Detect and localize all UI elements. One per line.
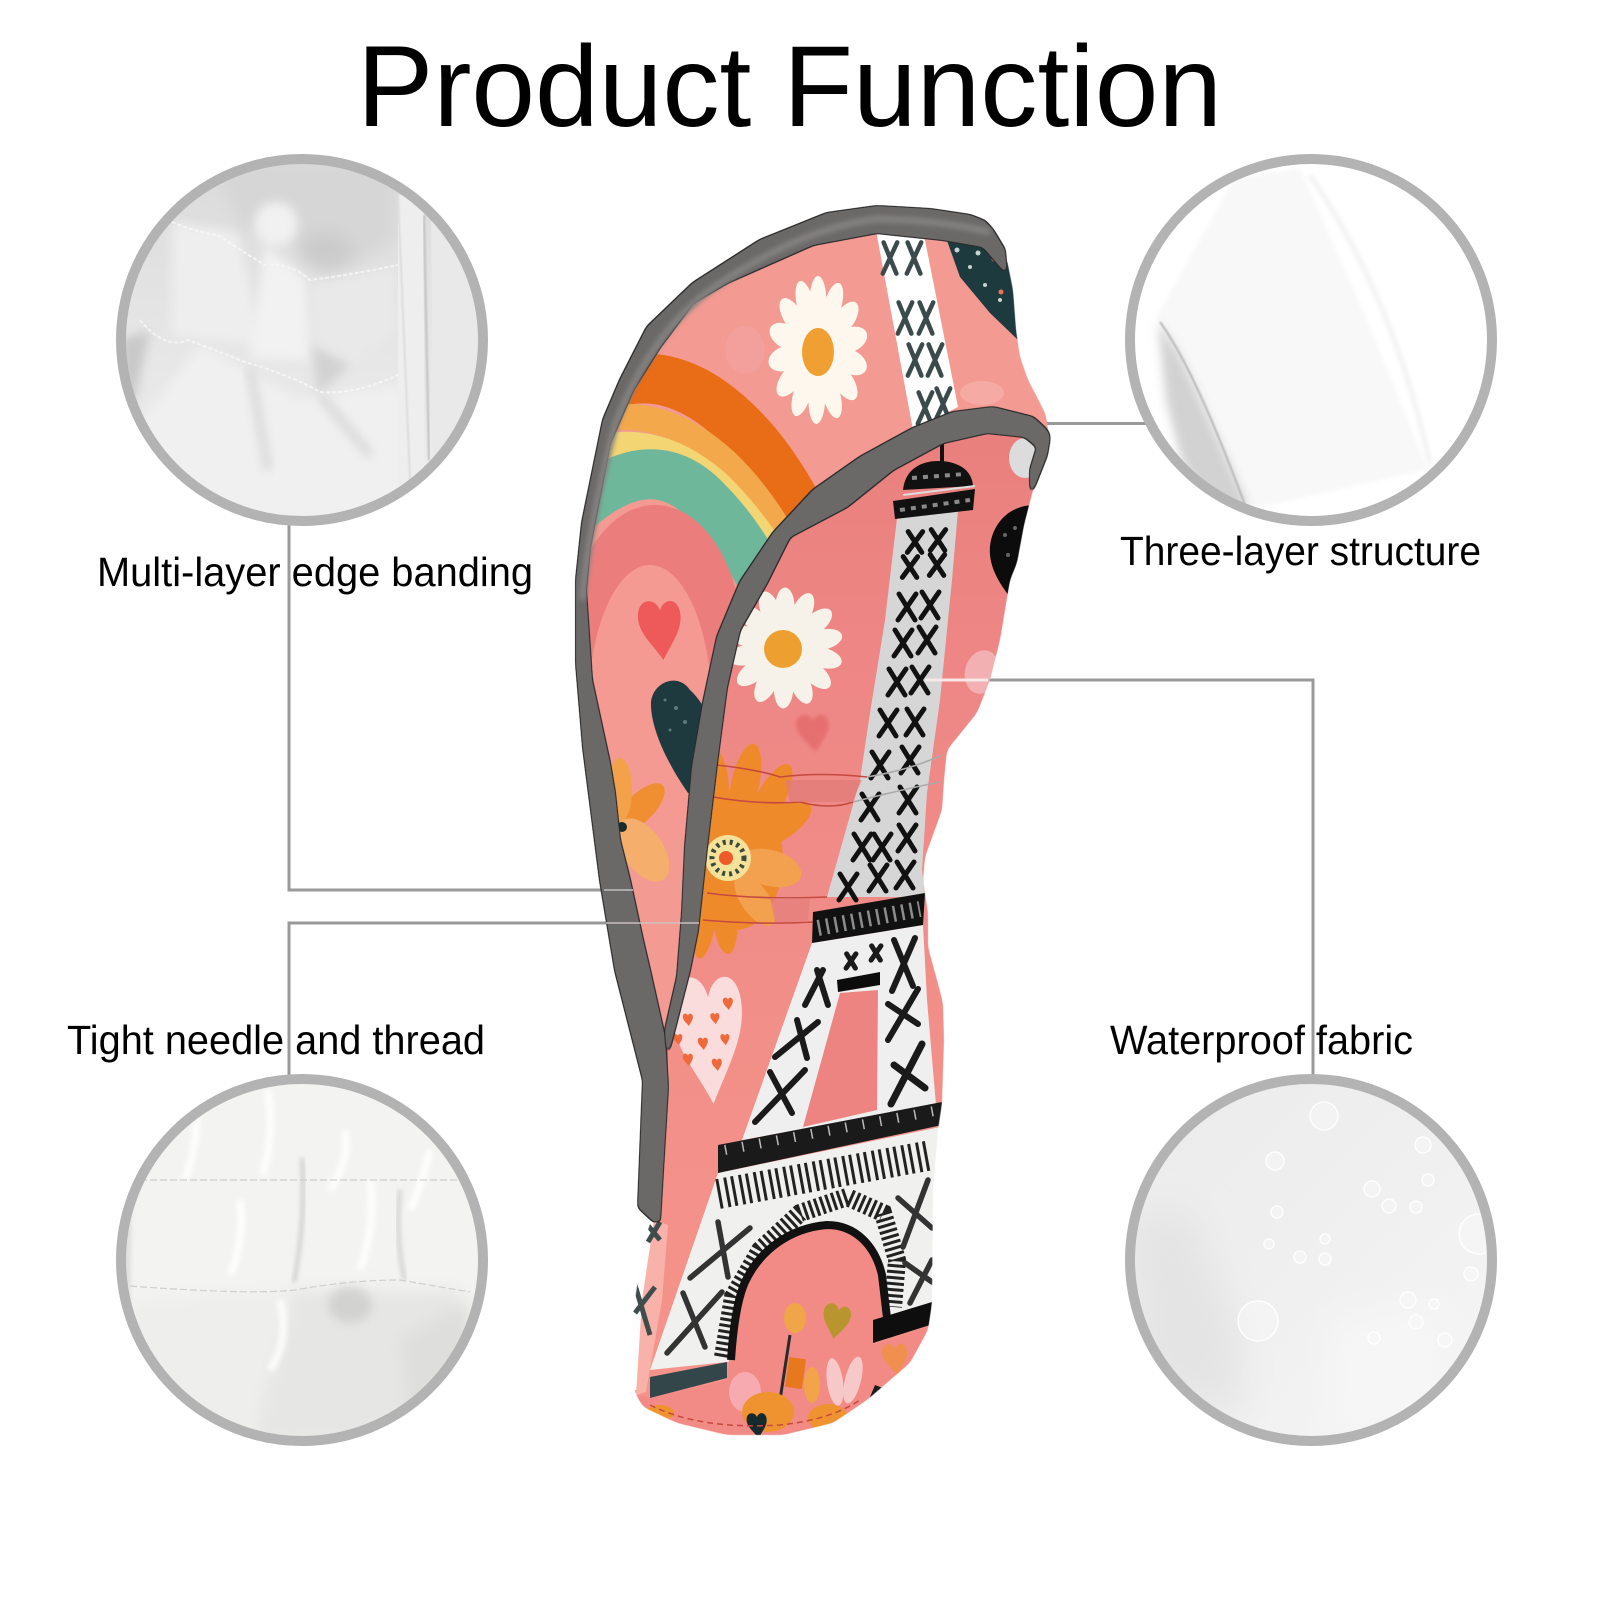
arch fringe	[723, 1197, 897, 1357]
line: multi-layer edge banding	[289, 525, 604, 890]
label: waterproof fabric: Waterproof fabric	[1110, 1017, 1413, 1063]
shaded band between stitches	[785, 780, 862, 802]
dark heart top right	[945, 235, 1018, 340]
tower lower legs	[742, 925, 936, 1140]
line: three-layer structure	[1045, 422, 1148, 425]
faint line crossing product, stitching	[606, 922, 699, 924]
scrap at lower band	[666, 1048, 668, 1069]
black heart right	[990, 505, 1030, 594]
daisy on front	[726, 588, 844, 709]
pink arch	[587, 505, 736, 668]
red heart	[638, 601, 681, 660]
bottom hem stitching	[650, 1400, 860, 1426]
small dim heart	[796, 715, 829, 752]
stitching lines	[703, 755, 942, 923]
bottom flowers	[646, 1302, 907, 1438]
pale patch right	[964, 650, 996, 694]
tower body	[827, 510, 958, 900]
panel: detail circle, three-layer structure	[1125, 154, 1497, 526]
line: tight needle and thread	[289, 923, 606, 1075]
tower feet	[650, 1302, 932, 1398]
daisy on back	[767, 276, 869, 424]
line: waterproof fabric	[985, 680, 1313, 1075]
back panel artwork	[567, 225, 1018, 1070]
loop fringe	[718, 1155, 932, 1194]
connector lines	[289, 424, 1313, 1075]
arch interior	[639, 1221, 903, 1434]
tower strip on back	[875, 225, 958, 430]
panel: detail circle, waterproof fabric	[1125, 1074, 1499, 1446]
tower dome and antenna	[893, 440, 975, 519]
dark heart	[651, 681, 706, 793]
faint line crossing product, banding	[604, 889, 633, 891]
left scrap crosses	[635, 1222, 660, 1335]
band: outer edge binding	[576, 206, 1007, 1222]
band: front flap binding	[665, 407, 1050, 1060]
orange flower on back	[612, 758, 670, 882]
panel: detail circle, edge banding	[116, 154, 490, 526]
tower waist band	[812, 893, 925, 943]
title: Product Function	[357, 23, 1222, 151]
pink heart with small hearts	[672, 977, 742, 1104]
pale circle top right	[1009, 438, 1035, 478]
white line crossing product, waterproof	[925, 678, 988, 682]
crosses beside arch	[667, 1180, 932, 1353]
label: multi-layer edge banding: Multi-layer edge banding	[97, 549, 533, 595]
rainbow	[570, 378, 810, 575]
tower platform	[718, 1102, 942, 1173]
panel: detail circle, needle and thread	[116, 1074, 488, 1446]
pink lower-left wedge and white lower section	[625, 1127, 940, 1395]
label: tight needle and thread: Tight needle and thread	[67, 1017, 485, 1063]
band highlight, upper	[582, 219, 990, 600]
label: three-layer structure: Three-layer structure	[1120, 528, 1481, 574]
orange sunflower	[694, 744, 812, 958]
product: golf club head cover	[560, 190, 1070, 1450]
pale patches	[960, 381, 1004, 405]
front panel	[632, 434, 1035, 1436]
